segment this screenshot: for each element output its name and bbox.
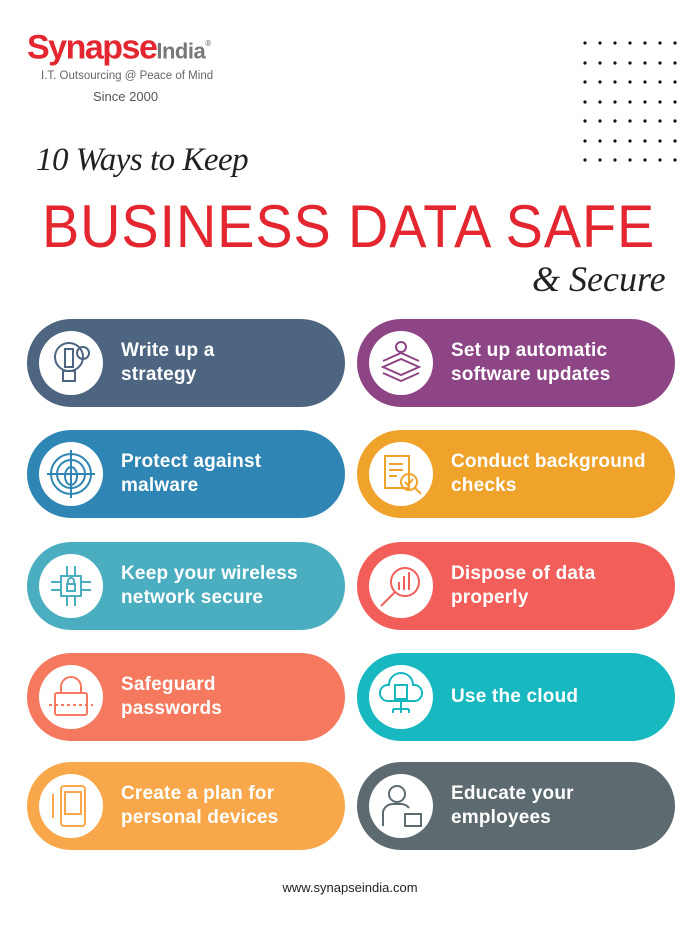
pill 6: Dispose of data <box>451 563 595 584</box>
logo: I.T. Outsourcing @ Peace of Mind <box>41 70 213 82</box>
pill 1: Write up a <box>121 340 214 361</box>
pill 5 <box>27 542 345 630</box>
pill 9: personal devices <box>121 807 278 828</box>
pill 9: Create a plan for <box>121 783 274 804</box>
pill 3: malware <box>121 475 198 496</box>
pill 2: Set up automatic <box>451 340 607 361</box>
pill 4: checks <box>451 475 517 496</box>
pill 10: employees <box>451 807 551 828</box>
footer url: www.synapseindia.com <box>282 880 418 895</box>
logo <box>27 28 213 104</box>
pill 1 <box>27 319 345 407</box>
pill 3 <box>27 430 345 518</box>
pill 7 <box>27 653 345 741</box>
pill 1: strategy <box>121 364 197 385</box>
pill 3: Protect against <box>121 451 261 472</box>
subtitle script: 10 Ways to Keep <box>36 142 248 178</box>
pill 6: properly <box>451 587 529 608</box>
pill 8 <box>357 653 675 741</box>
dot grid <box>583 41 677 162</box>
pill 10 <box>357 762 675 850</box>
pill 6 <box>357 542 675 630</box>
pill 10: Educate your <box>451 783 574 804</box>
logo: Since 2000 <box>93 89 158 104</box>
pill 2: software updates <box>451 364 610 385</box>
logo: SynapseIndia® <box>27 28 210 66</box>
pill 7: passwords <box>121 698 222 719</box>
pill 4 <box>357 430 675 518</box>
pill 4: Conduct background <box>451 451 646 472</box>
pill 9 <box>27 762 345 850</box>
pill 7: Safeguard <box>121 674 216 695</box>
pill 2 <box>357 319 675 407</box>
main title: BUSINESS DATA SAFE <box>42 193 655 260</box>
pill 5: network secure <box>121 587 263 608</box>
& Secure: & Secure <box>532 259 666 299</box>
pill 5: Keep your wireless <box>121 563 298 584</box>
pill 8: Use the cloud <box>451 686 578 707</box>
